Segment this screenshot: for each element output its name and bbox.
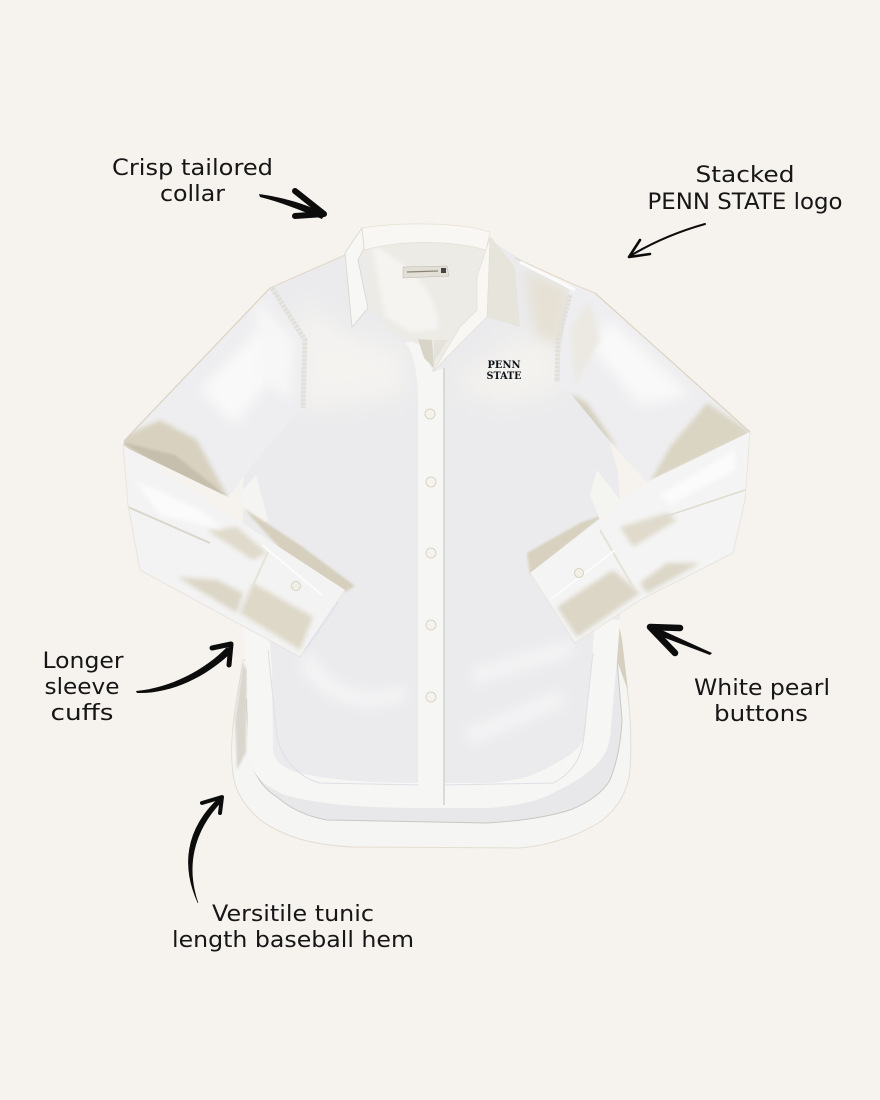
inside collar stand: [362, 231, 490, 368]
left forearm: [124, 446, 345, 651]
cuff button left: [292, 582, 300, 590]
left upper sleeve outline: [124, 288, 270, 441]
label: logo: [648, 162, 842, 215]
label: hem: [172, 901, 414, 953]
upper chest lights: [312, 334, 390, 392]
right collar leaf: [433, 238, 490, 372]
cuff button right: [574, 568, 584, 578]
label: collar: collar: [160, 181, 226, 207]
logo: PENN STATE: STATE: [486, 370, 522, 382]
hem stitch line: [268, 650, 593, 785]
arrow: logo: [629, 224, 705, 257]
back hem layer: [232, 660, 631, 848]
right forearm: [530, 432, 749, 636]
arrow: hem: [188, 797, 222, 903]
right upper sleeve outline: [595, 293, 750, 432]
arrow: cuffs: [136, 644, 232, 693]
label: logo: PENN STATE logo: [648, 189, 842, 215]
left forearm outline: [123, 445, 345, 657]
left cuff edge: [305, 602, 338, 650]
side band left: [243, 476, 268, 521]
label: buttons: White pearl: [694, 675, 830, 701]
hem band: [243, 620, 620, 808]
label: cuffs: Longer: [42, 648, 124, 674]
label: cuffs: cuffs: [50, 700, 114, 726]
shoulder outline: [270, 255, 595, 293]
shirt photo: [110, 224, 760, 848]
placket buttons: [425, 409, 436, 702]
body shading: [243, 270, 620, 808]
left upper sleeve: [123, 292, 290, 497]
logo: PENN STATE: [486, 359, 522, 382]
right collar strip: [487, 236, 520, 327]
logo: PENN STATE: PENN: [488, 359, 521, 371]
label: cuffs: sleeve: [44, 674, 119, 700]
button placket: [405, 340, 444, 805]
left collar leaf: [345, 228, 368, 327]
middle hem layer: [246, 660, 622, 823]
shoulder yoke seams: [272, 288, 305, 408]
collar top band: [362, 224, 490, 250]
inner beige: [418, 339, 434, 368]
label: logo: Stacked: [696, 162, 794, 188]
label: buttons: buttons: [714, 701, 808, 727]
arrow: collar: [259, 191, 325, 219]
side shadow left hem: [235, 663, 247, 770]
right forearm outline: [530, 432, 750, 643]
label: hem: length baseball hem: [172, 927, 414, 953]
label: cuffs: [42, 648, 124, 726]
shadow under right forearm: [526, 516, 600, 575]
right upper sleeve: [562, 290, 749, 481]
label: hem: Versitile tunic: [212, 901, 374, 927]
arrow: buttons: [650, 627, 712, 655]
shirt body: [243, 240, 620, 808]
label: collar: Crisp tailored: [112, 155, 273, 181]
shadow under left forearm: [243, 508, 355, 592]
side shadow below right cuff: [617, 620, 628, 690]
label: collar: [112, 155, 273, 207]
neck label: [403, 266, 449, 278]
side band right: [590, 470, 620, 520]
label: buttons: [694, 675, 830, 727]
